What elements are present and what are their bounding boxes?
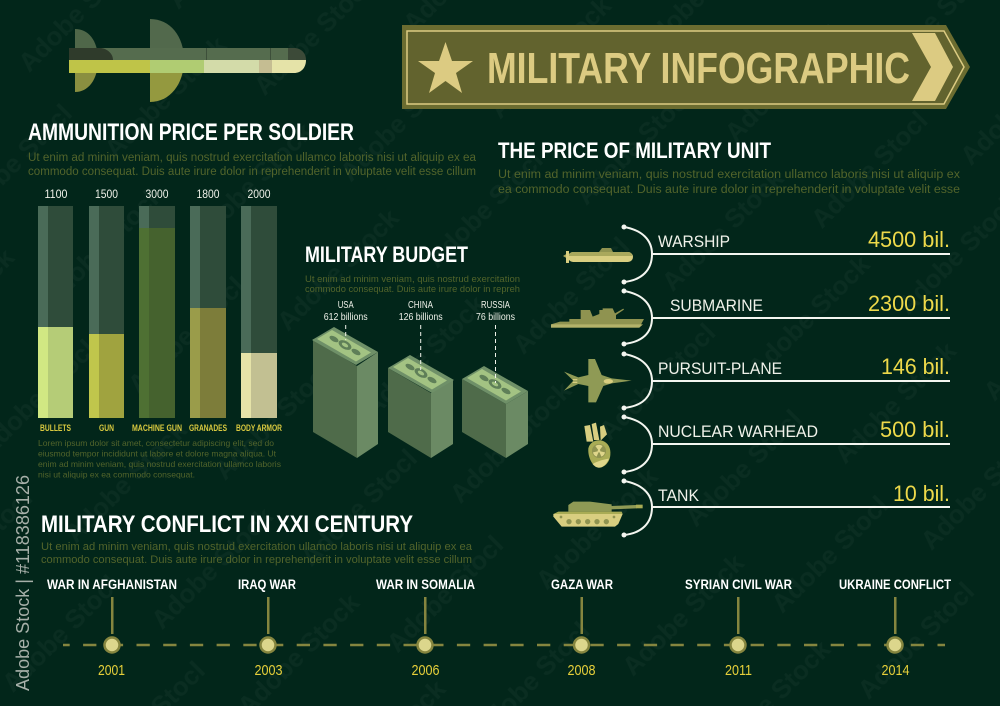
row: warship — [563, 224, 950, 284]
icon: missile — [69, 19, 306, 102]
timeline axis — [63, 644, 945, 646]
bar: gun — [89, 187, 124, 433]
event: 2006 — [376, 577, 475, 679]
panel: military conflict timeline — [41, 511, 952, 679]
event: 2003 — [238, 577, 296, 679]
row: submarine: SUBMARINE — [670, 296, 763, 315]
money stack: China — [388, 300, 454, 458]
panel: military budget — [305, 242, 528, 458]
row: tank — [553, 478, 950, 538]
text block: lorem: Lorem ipsum dolor sit amet, consectetur adipiscing elit, sed do — [38, 438, 274, 448]
bar: body armor: BODY ARMOR — [236, 423, 282, 433]
event: 2003: 2003 — [254, 662, 282, 679]
event: 2014 — [839, 577, 952, 679]
icon: warship — [551, 308, 644, 328]
event: 2001: WAR IN AFGHANISTAN — [47, 577, 177, 592]
text block: commodo consequat. Duis aute irure dolor in repreh — [305, 284, 520, 295]
bar: bullets: 1100 — [44, 187, 68, 201]
text block: Ut enim ad minim veniam, quis nostrud exercitation ullamco laboris nisi ut aliquip ex — [498, 169, 960, 181]
bar: gun: GUN — [99, 423, 114, 433]
event: 2008: GAZA WAR — [551, 577, 613, 592]
bar: body armor: 2000 — [248, 187, 271, 201]
heading: MILITARY CONFLICT IN XXI CENTURY — [41, 511, 413, 538]
icon: star — [418, 42, 473, 93]
money stack: USA: USA — [338, 300, 354, 311]
row: submarine: 2300 bil. — [868, 291, 950, 316]
text block — [41, 541, 473, 566]
row: tank: TANK — [658, 486, 700, 505]
money stack: Russia: 76 billions — [476, 311, 515, 323]
money stack: China: 126 billions — [399, 311, 443, 323]
heading: MILITARY BUDGET — [305, 242, 468, 267]
row: warship: 4500 bil. — [868, 227, 950, 252]
event: 2003: IRAQ WAR — [238, 577, 296, 592]
money stack: China: CHINA — [408, 300, 433, 311]
event: 2014: UKRAINE CONFLICT — [839, 577, 952, 592]
text block: lorem — [38, 438, 281, 480]
money stack: Russia — [462, 300, 528, 458]
event: 2006: WAR IN SOMALIA — [376, 577, 475, 592]
heading: AMMUNITION PRICE PER SOLDIER — [28, 119, 354, 146]
event: 2011 — [685, 577, 792, 679]
row: submarine — [551, 288, 950, 346]
text block — [305, 274, 520, 295]
text block: lorem: enim ad minim veniam, quis nostrud exercitation ullamco laboris — [38, 459, 281, 469]
row: nuclear warhead: NUCLEAR WARHEAD — [658, 422, 818, 441]
bar: granades — [189, 187, 227, 433]
text block: lorem: nisi ut aliquip ex ea commodo consequat. — [38, 470, 195, 480]
bar chart — [38, 187, 282, 433]
event: 2008 — [551, 577, 613, 679]
text block: commodo consequat. Duis aute irure dolor in reprehenderit in voluptate velit esse cillum — [28, 166, 476, 178]
row: nuclear warhead — [584, 414, 950, 474]
bar: gun: 1500 — [95, 187, 118, 201]
title: MILITARY INFOGRAPHIC — [487, 44, 910, 93]
bar: machine gun: MACHINE GUN — [132, 423, 182, 433]
bar: machine gun: 3000 — [146, 187, 169, 201]
icon: nuclear bomb — [584, 423, 610, 468]
icon: chevron — [912, 33, 953, 101]
heading: THE PRICE OF MILITARY UNIT — [498, 138, 771, 163]
text block: ea commodo consequat. Duis aute irure dolor in reprehenderit in voluptate velit esse — [498, 184, 960, 196]
title banner — [402, 25, 970, 109]
event: 2011: SYRIAN CIVIL WAR — [685, 577, 792, 592]
row: tank: 10 bil. — [893, 481, 950, 506]
panel: price of military unit — [498, 138, 960, 538]
row: nuclear warhead: 500 bil. — [880, 417, 950, 442]
text block — [28, 152, 477, 178]
money stack: Russia: RUSSIA — [481, 300, 510, 311]
panel: ammunition price — [28, 119, 477, 480]
text block: commodo consequat. Duis aute irure dolor in reprehenderit in voluptate velit esse cillum — [41, 554, 472, 566]
row: pursuit plane: PURSUIT-PLANE — [658, 359, 782, 378]
side credit text: Adobe Stock | #118386126 — [13, 475, 33, 691]
event: 2001: 2001 — [98, 662, 125, 679]
bar: bullets — [38, 187, 73, 433]
bar: granades: GRANADES — [189, 423, 227, 433]
row: pursuit plane: 146 bil. — [881, 354, 950, 379]
row: pursuit plane — [564, 352, 950, 410]
money stack: USA — [312, 300, 378, 458]
event: 2011: 2011 — [725, 662, 752, 679]
text block: Ut enim ad minim veniam, quis nostrud exercitation — [305, 274, 520, 285]
text block: Ut enim ad minim veniam, quis nostrud exercitation ullamco laboris nisi ut aliquip ex ea — [41, 541, 473, 553]
bar: body armor — [236, 187, 282, 433]
text block: lorem: eiusmod tempor incididunt ut labore et dolore magna aliqua. Ut — [38, 448, 277, 458]
icon: plane — [564, 359, 632, 402]
text block: Ut enim ad minim veniam, quis nostrud exercitation ullamco laboris nisi ut aliquip ex ea — [28, 152, 477, 164]
bar: bullets: BULLETS — [40, 423, 71, 433]
event: 2001 — [47, 577, 177, 679]
event: 2006: 2006 — [412, 662, 440, 679]
icon: submarine — [563, 248, 633, 263]
icon: tank — [553, 502, 643, 527]
text block — [498, 169, 960, 196]
event: 2008: 2008 — [568, 662, 596, 679]
bar: machine gun — [132, 187, 182, 433]
row: warship: WARSHIP — [658, 232, 730, 251]
event: 2014: 2014 — [882, 662, 910, 679]
bar: granades: 1800 — [196, 187, 220, 201]
money stack: USA: 612 billions — [324, 311, 368, 323]
